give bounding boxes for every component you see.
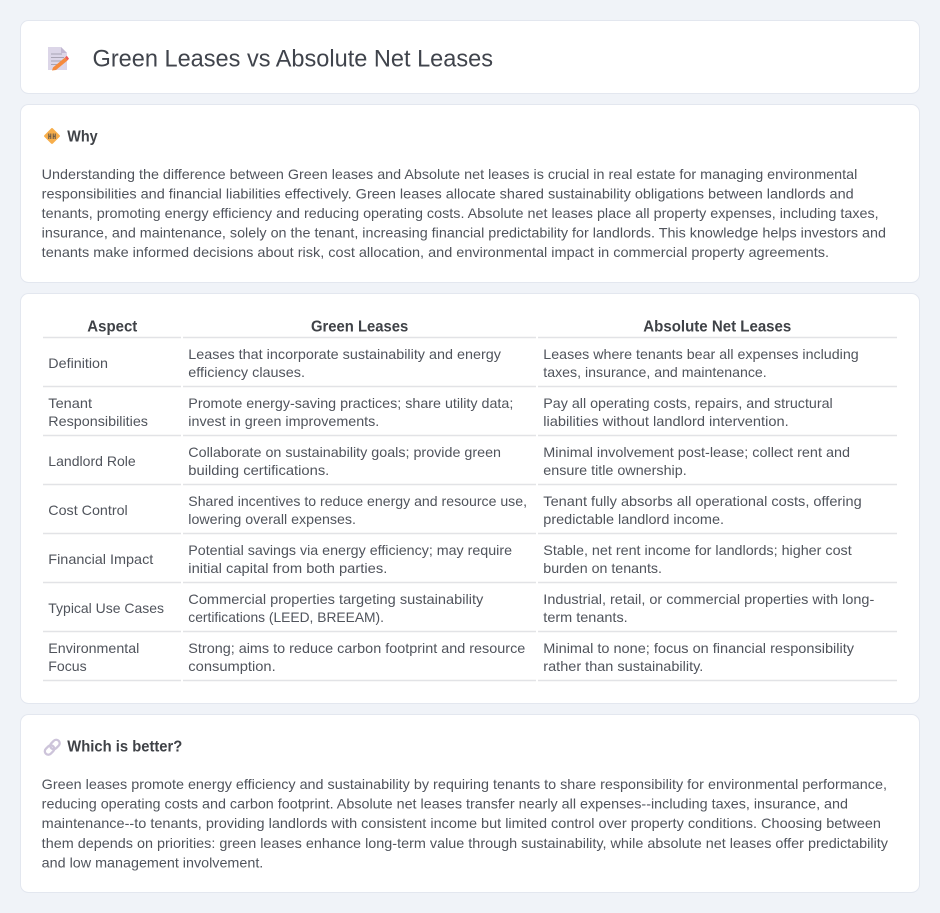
text block: which is better paragraph: and low management involvement. — [42, 854, 263, 870]
row: definition: efficiency clauses. — [188, 364, 305, 380]
row: environmental focus: consumption. — [188, 658, 276, 674]
text block: why paragraph: responsibilities and financial liabilities effectively. Green leases allocate shared sustainability obligations between landlords and — [42, 186, 854, 202]
row: cost control: lowering overall expenses. — [188, 511, 356, 527]
row: financial impact: initial capital from both parties. — [188, 560, 387, 576]
row: landlord role: Landlord Role — [48, 453, 136, 469]
row: cost control: Tenant fully absorbs all operational costs, offering — [543, 493, 862, 509]
row: tenant responsibilities: Responsibilities — [48, 413, 148, 429]
text block: which is better paragraph: Green leases promote energy efficiency and sustainability by requiring tenants to share responsibility for environmental performance, — [42, 776, 887, 792]
row: definition — [43, 346, 897, 386]
row: typical use cases: Commercial properties targeting sustainability — [188, 591, 483, 607]
row: typical use cases: Typical Use Cases — [48, 600, 164, 616]
row: tenant responsibilities — [43, 395, 897, 436]
row: landlord role: ensure title ownership. — [543, 462, 687, 478]
text block: which is better paragraph: them depends on priorities: green leases enhance long-term value through sustainability, while absolute net leases offer predictability — [42, 835, 888, 851]
row: definition: taxes, insurance, and maintenance. — [543, 364, 767, 380]
row: financial impact: burden on tenants. — [543, 560, 662, 576]
title: Green Leases vs Absolute Net Leases — [92, 46, 493, 72]
row: financial impact: Financial Impact — [48, 551, 153, 567]
table header row: Aspect — [87, 319, 138, 336]
row: typical use cases: term tenants. — [543, 609, 628, 625]
row: environmental focus — [43, 640, 897, 680]
row: typical use cases: Industrial, retail, or commercial properties with long- — [543, 591, 875, 607]
row: environmental focus: Minimal to none; focus on financial responsibility — [543, 640, 854, 656]
row: tenant responsibilities: Tenant — [48, 395, 92, 411]
row: definition: Definition — [48, 355, 108, 371]
row: cost control — [43, 493, 897, 534]
table header row: Green Leases — [311, 319, 408, 336]
row: definition: Leases where tenants bear all expenses including — [543, 346, 859, 362]
text block: which is better paragraph — [42, 776, 888, 870]
row: financial impact: Potential savings via energy efficiency; may require — [188, 542, 512, 558]
row: financial impact: Stable, net rent income for landlords; higher cost — [543, 542, 852, 558]
row: landlord role: Minimal involvement post-lease; collect rent and — [543, 444, 850, 460]
row: environmental focus: Strong; aims to reduce carbon footprint and resource — [188, 640, 526, 656]
row: cost control: predictable landlord income. — [543, 511, 724, 527]
panel: which is better — [20, 714, 920, 892]
text block: which is better paragraph: maintenance--to tenants, providing landlords with consistent income but limited control over property conditions. Choosing between — [42, 815, 881, 831]
row: tenant responsibilities: invest in green improvements. — [188, 413, 379, 429]
row: landlord role: building certifications. — [188, 462, 329, 478]
icon: memo with pencil — [48, 47, 69, 70]
text block: why paragraph: tenants, promoting energy efficiency and reducing operating costs. Absolute net leases place all property expenses, including taxes, — [42, 205, 879, 221]
row: tenant responsibilities: Pay all operating costs, repairs, and structural — [543, 395, 833, 411]
panel: title header — [20, 20, 920, 94]
row: landlord role — [43, 444, 897, 484]
icon: chain link — [43, 738, 61, 756]
table header row — [43, 319, 897, 338]
text block: why paragraph — [42, 166, 886, 260]
row: environmental focus: rather than sustainability. — [543, 658, 703, 674]
text block: which is better paragraph: reducing operating costs and carbon footprint. Absolute net leases transfer nearly all expenses--including taxes, insurance, and — [42, 796, 848, 812]
icon: warning diamond — [44, 128, 60, 144]
heading: why: Why — [67, 129, 98, 146]
row: tenant responsibilities: Promote energy-saving practices; share utility data; — [188, 395, 513, 411]
text block: why paragraph: tenants make informed decisions about risk, cost allocation, and environmental impact in commercial property agreements. — [42, 244, 829, 260]
row: typical use cases: certifications (LEED, BREEAM). — [188, 609, 384, 625]
table header row: Absolute Net Leases — [643, 319, 791, 336]
row: landlord role: Collaborate on sustainability goals; provide green — [188, 444, 501, 460]
row: financial impact — [43, 542, 897, 582]
row: environmental focus: Focus — [48, 658, 87, 674]
row: definition: Leases that incorporate sustainability and energy — [188, 346, 501, 362]
text block: why paragraph: Understanding the difference between Green leases and Absolute net leases is crucial in real estate for managing environmental — [42, 166, 857, 182]
panel: why — [20, 104, 920, 282]
row: environmental focus: Environmental — [48, 640, 139, 656]
row: cost control: Shared incentives to reduce energy and resource use, — [188, 493, 527, 509]
text block: why paragraph: insurance, and maintenance, solely on the tenant, increasing financial predictability for landlords. This knowledge helps investors and — [42, 224, 886, 240]
row: typical use cases — [43, 591, 897, 632]
panel: comparison table — [20, 294, 920, 704]
row: tenant responsibilities: liabilities without landlord intervention. — [543, 413, 789, 429]
row: cost control: Cost Control — [48, 502, 128, 518]
heading: which is better: Which is better? — [67, 739, 182, 756]
